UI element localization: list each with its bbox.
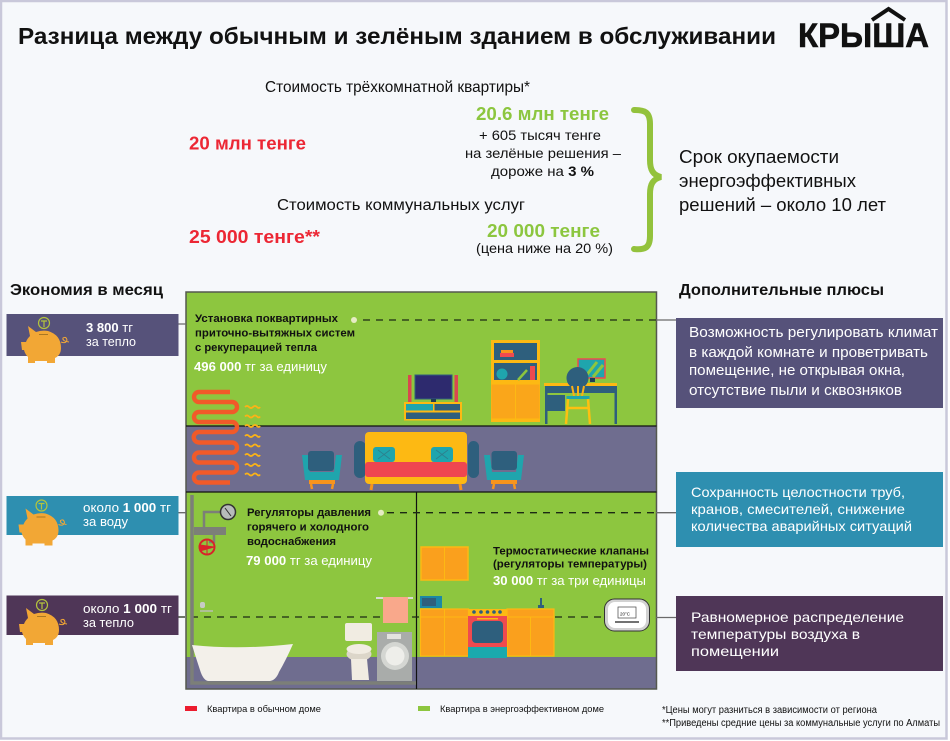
logo: Крыша: КРЫША bbox=[798, 17, 929, 55]
footnotes: *Цены могут разниться в зависимости от региона bbox=[662, 705, 877, 716]
label: ventilation systems: Установка поквартирных bbox=[195, 313, 339, 325]
savings box: heat 3 800: за тепло bbox=[86, 334, 136, 349]
benefit box: climate control: Возможность регулировать климат bbox=[689, 325, 938, 341]
icon: microwave bbox=[420, 596, 442, 608]
label: ventilation systems bbox=[194, 313, 355, 374]
icon: toilet bbox=[345, 623, 372, 680]
connector marker: ventilation bbox=[351, 317, 357, 323]
lower floor carpet bbox=[186, 657, 656, 689]
dashed connector lines bbox=[178, 320, 656, 617]
icon: desk with chair bbox=[544, 359, 617, 424]
legend: Квартира в энергоэффективном доме bbox=[440, 704, 604, 715]
benefit box: pipe integrity: количества аварийных ситуаций bbox=[691, 518, 912, 534]
benefit box: even temperature: помещении bbox=[691, 643, 779, 659]
legend bbox=[185, 704, 604, 715]
savings box: water 1 000: за воду bbox=[83, 514, 129, 529]
cost comparison: utilities: 25 000 тенге** bbox=[189, 227, 320, 247]
benefit box: climate control: помещение, не открывая окна, bbox=[689, 363, 905, 379]
icon: left armchair bbox=[302, 451, 342, 489]
label: thermostatic valves: 30 000 тг за три единицы bbox=[493, 574, 646, 588]
savings box: heat 1 000 bbox=[6, 596, 178, 645]
benefit box: pipe integrity: Сохранность целостности труб, bbox=[691, 484, 905, 500]
icon: bathtub bbox=[192, 644, 293, 681]
icon: radiator bbox=[194, 392, 260, 482]
savings box: heat 3 800: 3 800 тг bbox=[86, 320, 133, 335]
icon: water pipes with gauge and valve bbox=[192, 495, 416, 683]
benefit box: pipe integrity bbox=[676, 472, 943, 547]
icon: upper kitchen cabinet bbox=[421, 547, 468, 580]
savings box: heat 1 000: около 1 000 тг bbox=[83, 601, 172, 616]
cost comparison: apartment: дороже на 3 % bbox=[491, 163, 595, 179]
cost comparison: apartment: 20 млн тенге bbox=[189, 134, 306, 154]
icon: towel bbox=[376, 597, 413, 623]
icon: washing machine bbox=[377, 632, 412, 681]
icon: stove bbox=[468, 609, 507, 658]
savings box: water 1 000 bbox=[6, 496, 178, 546]
cost comparison: utilities: 20 000 тенге bbox=[487, 221, 600, 241]
cost comparison: apartment: на зелёные решения – bbox=[465, 145, 621, 161]
label: thermostatic valves bbox=[493, 546, 649, 588]
title: Разница между обычным и зелёным зданием в обслуживании bbox=[18, 23, 776, 49]
heading: monthly savings: Экономия в месяц bbox=[10, 282, 163, 299]
building illustration bbox=[178, 292, 656, 689]
icon: thermostat bbox=[604, 599, 650, 631]
payback period text: энергоэффективных bbox=[679, 171, 856, 191]
icon: sofa bbox=[354, 432, 479, 490]
benefit box: climate control: отсутствие пыли и сквозняков bbox=[689, 383, 902, 399]
cost comparison: apartment: Стоимость трёхкомнатной квартиры* bbox=[265, 79, 530, 96]
label: ventilation systems: с рекуперацией тепла bbox=[195, 342, 318, 354]
label: pressure regulators: 79 000 тг за единицу bbox=[246, 554, 373, 568]
label: ventilation systems: 496 000 тг за единицу bbox=[194, 360, 328, 374]
icon: right armchair bbox=[484, 451, 524, 489]
cost comparison: utilities: Стоимость коммунальных услуг bbox=[277, 197, 525, 214]
cost comparison: apartment bbox=[189, 79, 621, 179]
green curly brace bbox=[634, 110, 661, 249]
icon: bookcase bbox=[491, 340, 540, 422]
payback period text: решений – около 10 лет bbox=[679, 195, 886, 215]
legend: Квартира в обычном доме bbox=[207, 704, 321, 715]
benefit box: even temperature: Равномерное распределение bbox=[691, 609, 904, 625]
footnotes bbox=[662, 705, 940, 729]
icon: piggy bank bbox=[21, 318, 69, 363]
label: pressure regulators: Регуляторы давления bbox=[247, 507, 371, 519]
heading: additional benefits: Дополнительные плюсы bbox=[679, 282, 884, 299]
label: pressure regulators: водоснабжения bbox=[247, 536, 336, 548]
benefit box: pipe integrity: кранов, смесителей, снижение bbox=[691, 501, 905, 517]
cost comparison: apartment: + 605 тысяч тенге bbox=[479, 127, 601, 143]
floor dividers bbox=[186, 426, 656, 689]
icon: TV unit bbox=[404, 375, 462, 420]
savings box: heat 3 800 bbox=[6, 314, 178, 363]
label: thermostatic valves: (регуляторы температуры) bbox=[493, 558, 647, 570]
label: pressure regulators bbox=[246, 507, 373, 568]
icon: piggy bank bbox=[18, 500, 66, 546]
icon: piggy bank bbox=[19, 600, 67, 645]
payback period text: Срок окупаемости bbox=[679, 147, 839, 167]
upper floor carpet bbox=[186, 426, 656, 492]
savings box: heat 1 000: за тепло bbox=[83, 615, 134, 630]
benefit box: even temperature bbox=[676, 596, 943, 671]
label: pressure regulators: горячего и холодного bbox=[247, 522, 369, 534]
lower floor wall bbox=[186, 492, 656, 657]
cost comparison: utilities: (цена ниже на 20 %) bbox=[476, 240, 613, 256]
icon: kitchen base cabinets bbox=[420, 598, 554, 656]
savings box: water 1 000: около 1 000 тг bbox=[83, 500, 171, 515]
benefit box: climate control: в каждой комнате и проветривать bbox=[689, 345, 928, 361]
label: ventilation systems: приточно-вытяжных систем bbox=[195, 328, 355, 340]
payback period text bbox=[679, 147, 886, 215]
benefit box: climate control bbox=[676, 318, 943, 408]
upper floor wall bbox=[186, 292, 656, 426]
solid connector stubs bbox=[178, 320, 676, 618]
icon: thermostat: 20°C bbox=[620, 612, 631, 616]
building outline bbox=[186, 292, 656, 689]
connector marker: pressure regulators bbox=[378, 510, 384, 516]
benefit box: even temperature: температуры воздуха в bbox=[691, 626, 860, 642]
cost comparison: utilities bbox=[189, 197, 613, 256]
label: thermostatic valves: Термостатические клапаны bbox=[493, 546, 649, 558]
cost comparison: apartment: 20.6 млн тенге bbox=[476, 104, 609, 124]
